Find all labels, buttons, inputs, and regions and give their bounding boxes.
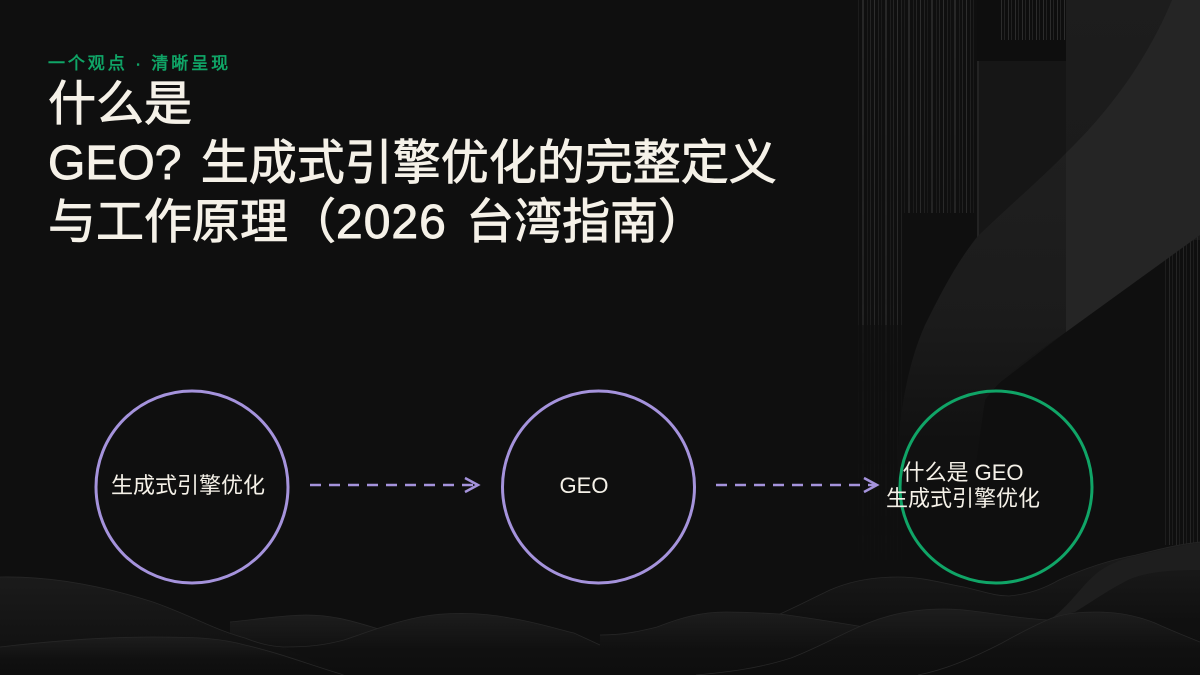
arrow 2	[716, 478, 877, 492]
title: 什么是	[48, 78, 192, 131]
label: circle 3	[886, 460, 1040, 511]
title: GEO? 生成式引擎优化的完整定义	[48, 137, 777, 190]
striped panel right	[1165, 235, 1200, 545]
circle 2	[502, 391, 694, 583]
label: circle 3: 什么是 GEO	[902, 460, 1024, 485]
striped panel left	[858, 0, 974, 325]
title	[48, 78, 777, 249]
dark vertical panel	[977, 61, 1066, 401]
striped panel top	[977, 0, 1066, 61]
label: circle 1: 生成式引擎优化	[111, 473, 265, 498]
swoosh ribbon	[897, 0, 1200, 470]
eyebrow: 一个观点 · 清晰呈现	[48, 54, 231, 73]
hills right	[600, 542, 1200, 675]
label: circle 2: GEO	[560, 473, 608, 498]
label: circle 3: 生成式引擎优化	[886, 486, 1040, 511]
title: 与工作原理（2026 台湾指南）	[48, 196, 706, 249]
circle 3	[900, 391, 1092, 583]
circle 1	[96, 391, 288, 583]
arrow 1	[310, 478, 478, 492]
hills left	[0, 577, 700, 675]
top right panel	[1066, 0, 1200, 240]
